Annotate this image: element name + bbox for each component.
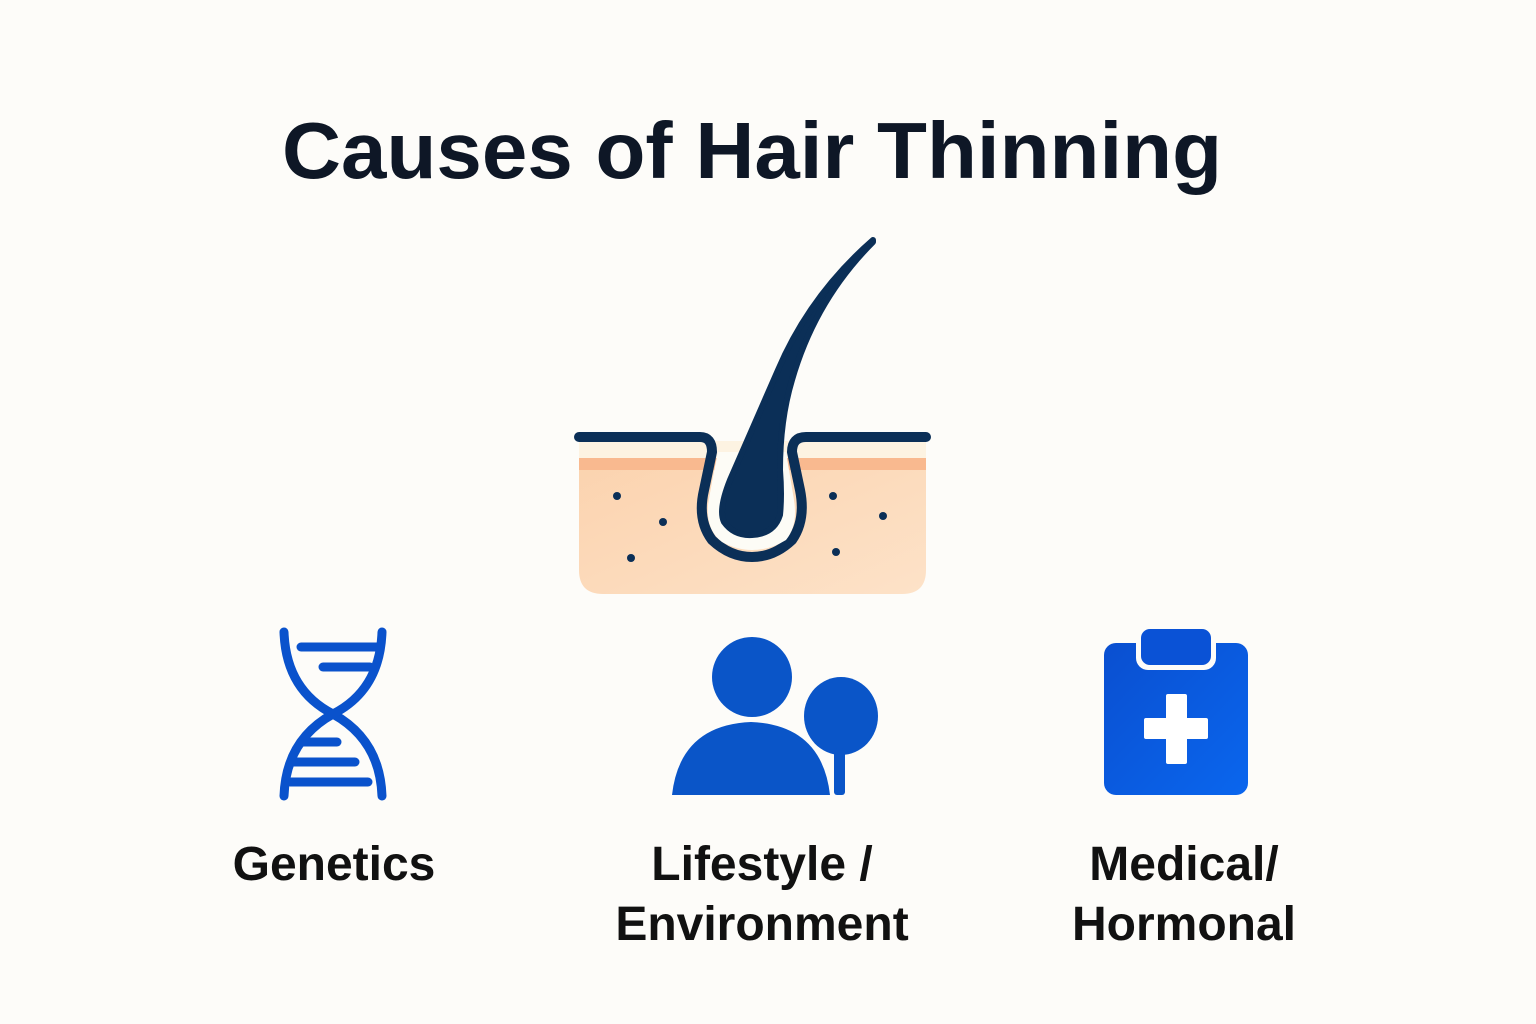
label: Lifestyle / Environment: Environment xyxy=(615,898,909,951)
label: Medical/Hormonal: Medical/ xyxy=(1089,838,1279,891)
label: Genetics: Genetics xyxy=(233,838,435,891)
icon: person with tree xyxy=(672,637,878,795)
icon: DNA xyxy=(284,632,382,796)
title: Causes of Hair Thinning xyxy=(282,106,1222,195)
label: Lifestyle / Environment: Lifestyle / xyxy=(651,838,873,891)
label: Medical/Hormonal: Hormonal xyxy=(1072,898,1296,951)
icon: hair follicle xyxy=(579,240,926,594)
icon: medical clipboard xyxy=(1104,624,1248,795)
